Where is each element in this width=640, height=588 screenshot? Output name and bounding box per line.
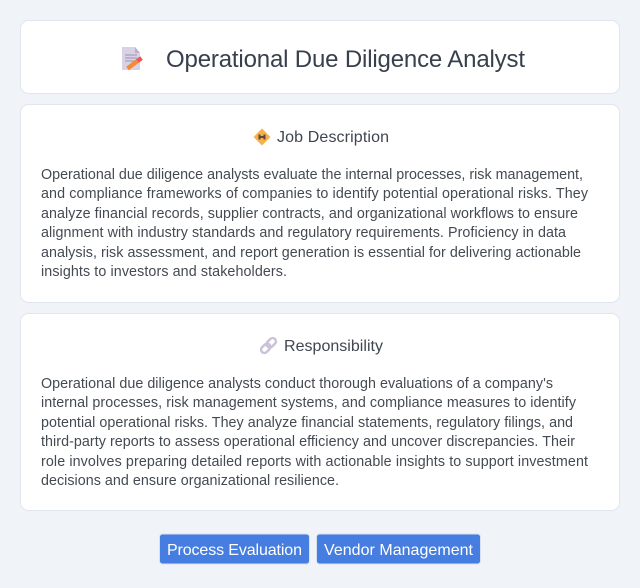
heading: job description: Job Description	[277, 129, 389, 146]
text block: job description body: and compliance frameworks of companies to identify potential operational risks. They	[41, 186, 589, 202]
icon: chain link	[260, 337, 277, 354]
text block: job description body: Operational due diligence analysts evaluate the internal processes, risk management,	[41, 167, 583, 183]
text block: responsibility body: Operational due diligence analysts conduct thorough evaluations of a company's	[41, 376, 553, 392]
icon: document with pencil	[122, 47, 142, 70]
tag: process evaluation	[160, 534, 310, 564]
text block: job description body: insights to investors and stakeholders.	[41, 264, 287, 280]
text block: responsibility body: decisions and ensure organizational resilience.	[41, 473, 339, 489]
heading: responsibility: Responsibility	[284, 338, 383, 355]
text block: job description body: analyze financial records, supplier contracts, and organizational workflows to ensure	[41, 206, 578, 222]
panel: job description	[20, 104, 620, 302]
text block: responsibility body: internal processes, risk management systems, and compliance measures to identify	[41, 395, 577, 411]
title: Operational Due Diligence Analyst	[166, 46, 525, 73]
text block: responsibility body: third-party reports to assess operational efficiency and uncover discrepancies. Their	[41, 434, 575, 450]
text block: job description body: analysis, risk assessment, and report generation is essential for delivering actionable	[41, 245, 581, 261]
panel: responsibility	[20, 314, 620, 510]
tag: vendor management	[316, 534, 480, 564]
text block: responsibility body: potential operational risks. They analyze financial statements, regulatory filings, and	[41, 415, 573, 431]
tag: process evaluation: Process Evaluation	[167, 542, 302, 559]
text block: responsibility body	[41, 376, 588, 489]
tag: vendor management: Vendor Management	[324, 542, 474, 559]
text block: job description body	[41, 167, 589, 280]
icon: amber diamond sign	[254, 128, 270, 146]
text block: responsibility body: role involves preparing detailed reports with actionable insights to support investment	[41, 454, 588, 470]
text block: job description body: alignment with industry standards and regulatory requirements. Proficiency in data	[41, 225, 566, 241]
panel: title header	[20, 20, 620, 94]
